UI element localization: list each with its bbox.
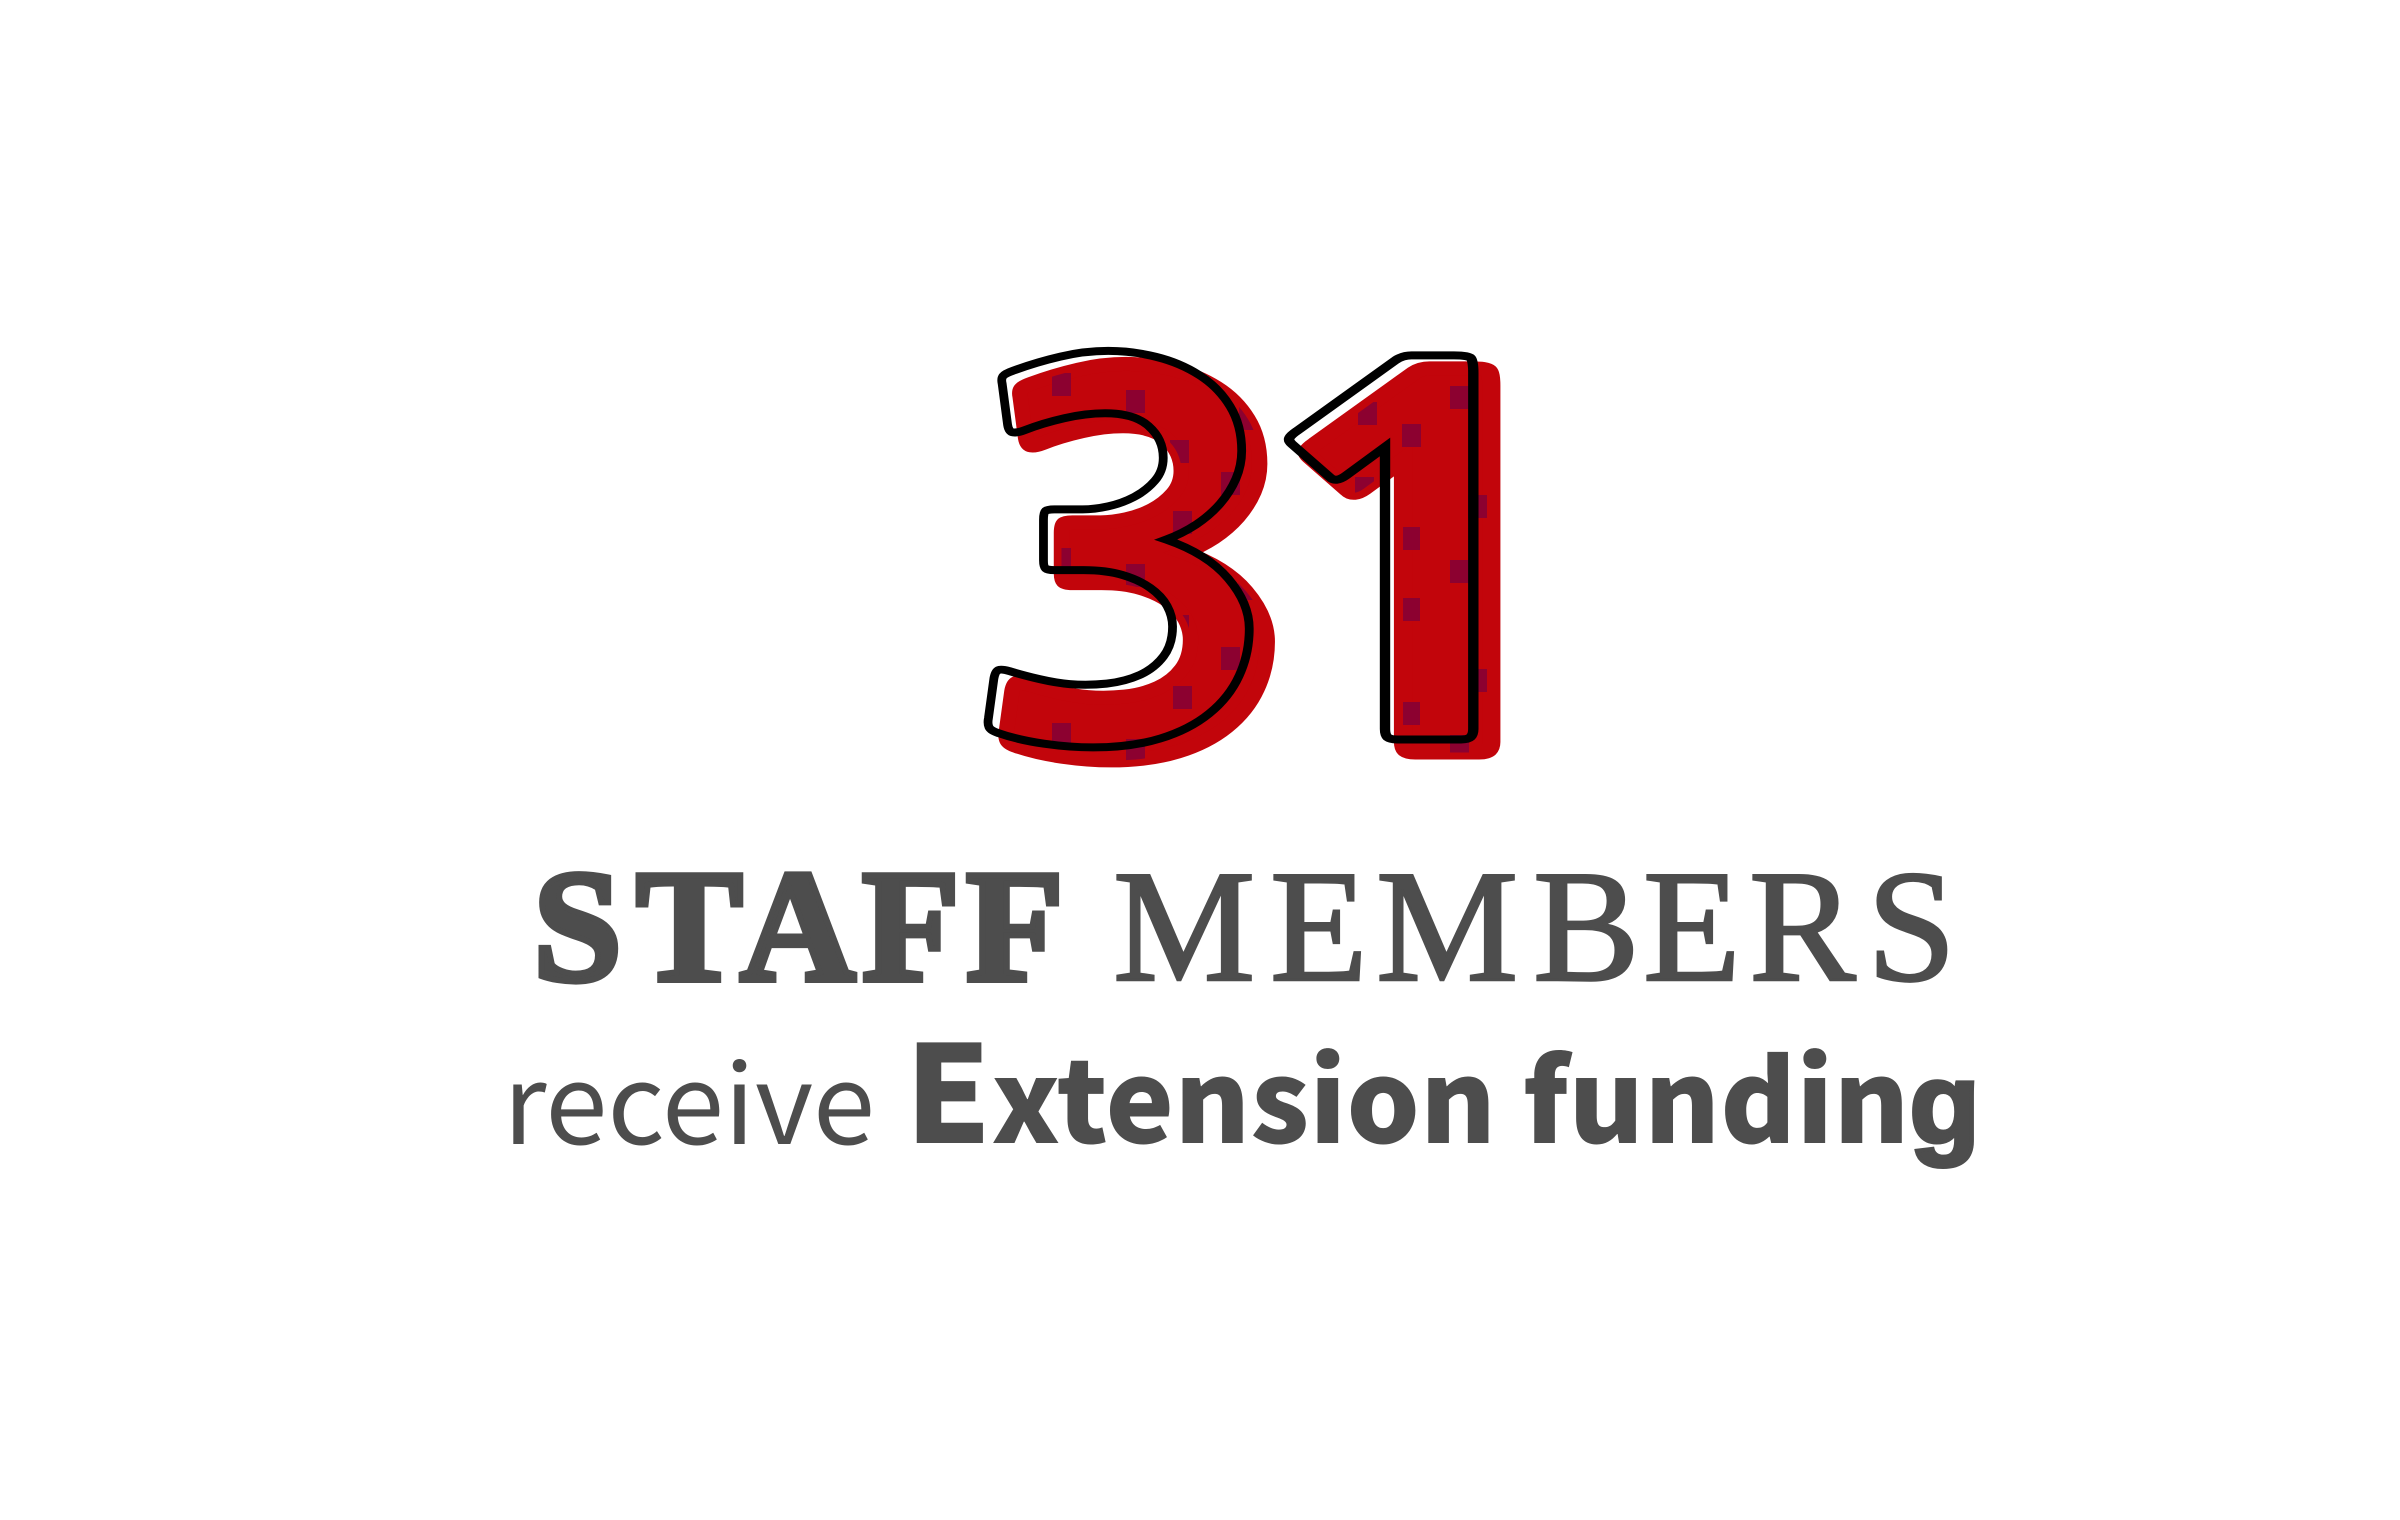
subheading: extension funding: Extension funding: [905, 986, 1980, 1182]
big number 31: [984, 346, 1500, 768]
black outlined digit 3: 3: [958, 315, 1288, 809]
heading: staff: STAFF: [533, 837, 1064, 1015]
heading: members: MEMBERS: [1113, 837, 1956, 1015]
dot pattern on number: [1052, 373, 1487, 760]
black outlined digit 1: 1: [1221, 315, 1611, 810]
subheading: receive: receive: [503, 1016, 875, 1176]
infographic: [513, 346, 1974, 1169]
red filled digit 1: 1: [1239, 328, 1629, 823]
red filled digit 3: 3: [976, 328, 1306, 822]
